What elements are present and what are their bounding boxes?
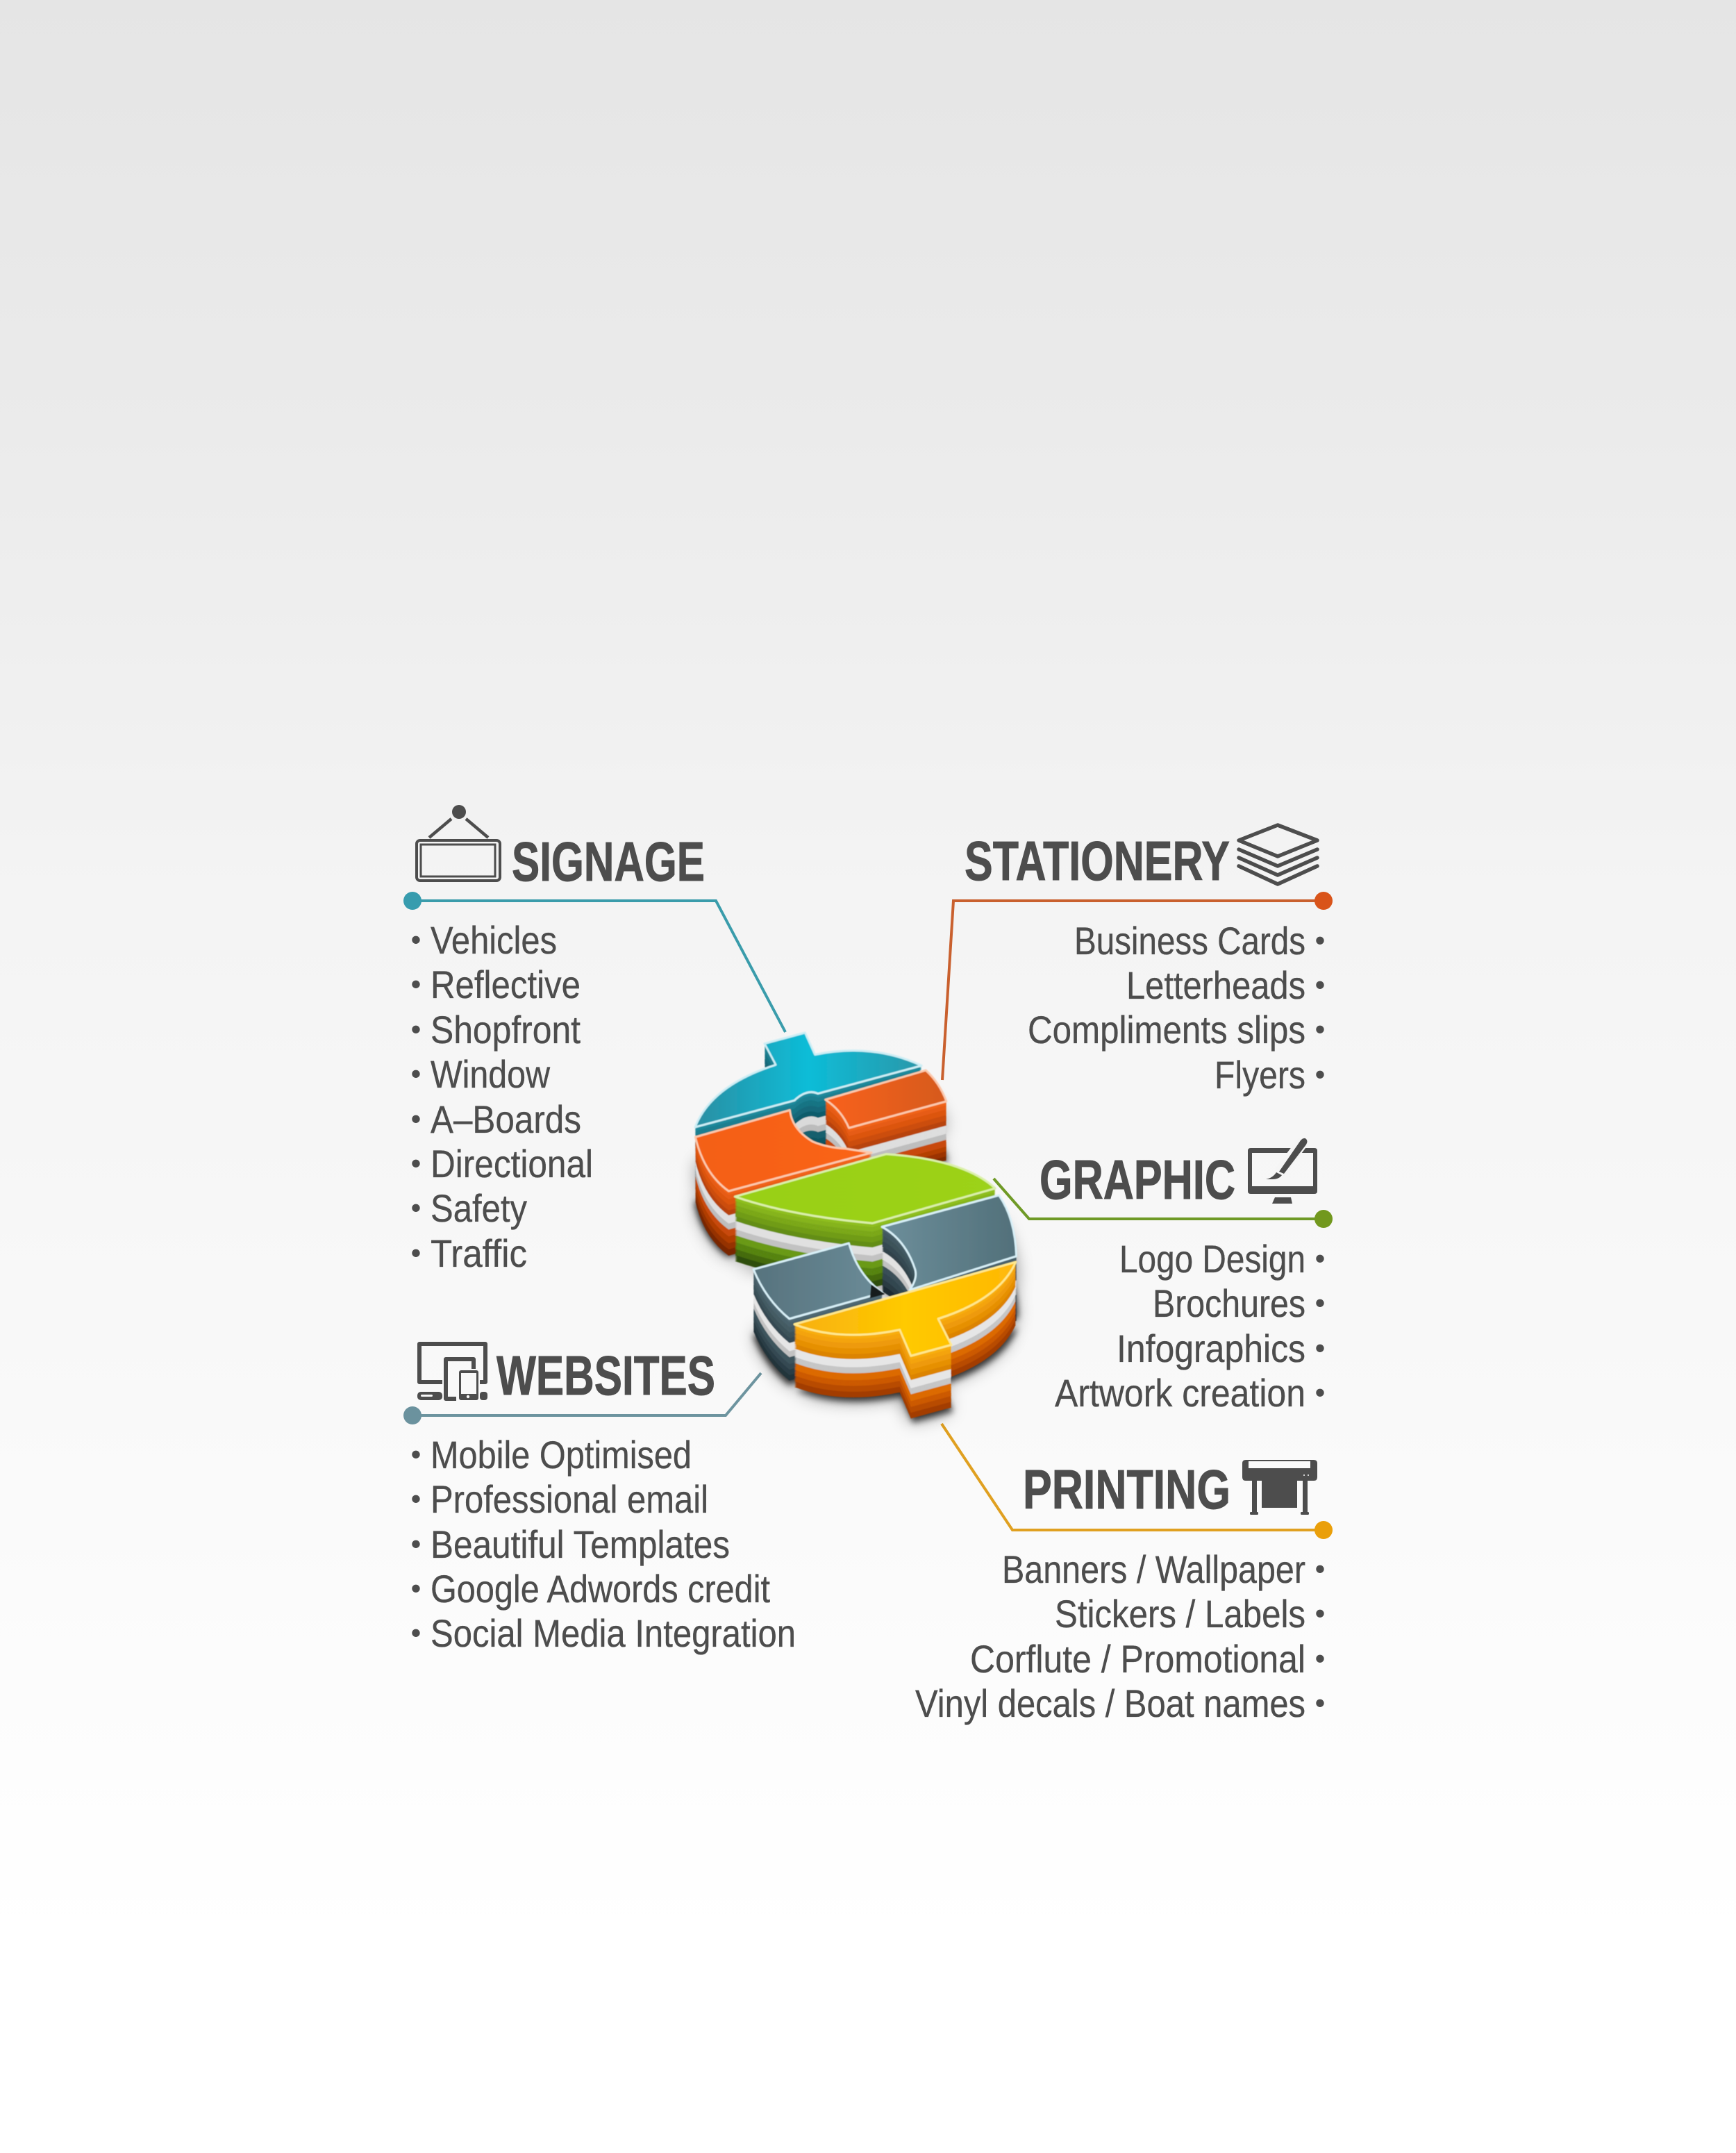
dollar body: [695, 1033, 1017, 1418]
list: graphic items: •: [1315, 1376, 1325, 1408]
heading: stationery: STATIONERY: [965, 830, 1230, 892]
list: signage items: •: [411, 1236, 421, 1269]
list: signage items: Vehicles: [431, 918, 557, 962]
list: graphic items: •: [1315, 1242, 1325, 1274]
icon: hanging sign: [417, 805, 500, 881]
list: stationery items: •: [1315, 1013, 1325, 1045]
list: stationery items: •: [1315, 968, 1325, 1001]
panel: stationery: [942, 825, 1333, 1097]
list: stationery items: [1028, 919, 1325, 1097]
dollar segment: orange right: [826, 1070, 946, 1187]
list: printing items: Corflute / Promotional: [970, 1637, 1305, 1681]
panel: websites: [403, 1344, 796, 1655]
list: signage items: •: [411, 923, 421, 956]
list: signage items: •: [411, 1191, 421, 1224]
list: signage items: •: [411, 1013, 421, 1045]
icon: large format printer: [1242, 1460, 1317, 1515]
list: signage items: Shopfront: [431, 1008, 581, 1051]
leader line: stationery: [942, 892, 1333, 1080]
icon: monitor with paintbrush: [1248, 1138, 1317, 1204]
list: stationery items: •: [1315, 1058, 1325, 1090]
list: graphic items: [1055, 1237, 1325, 1415]
list: signage items: Safety: [431, 1186, 527, 1230]
list: stationery items: Flyers: [1215, 1053, 1305, 1097]
heading: printing: PRINTING: [1023, 1458, 1230, 1520]
list: signage items: •: [411, 1147, 421, 1179]
list: printing items: •: [1315, 1642, 1325, 1674]
list: stationery items: •: [1315, 924, 1325, 956]
leader line: signage: [403, 892, 785, 1032]
leader line: graphic: [994, 1179, 1333, 1228]
list: stationery items: Compliments slips: [1028, 1008, 1305, 1051]
list: graphic items: •: [1315, 1331, 1325, 1364]
leader line: printing: [942, 1424, 1333, 1539]
list: signage items: A–Boards: [431, 1097, 581, 1141]
list: printing items: Stickers / Labels: [1055, 1592, 1305, 1636]
list: printing items: •: [1315, 1597, 1325, 1629]
list: printing items: •: [1315, 1686, 1325, 1719]
icon: paper stack: [1239, 825, 1317, 884]
list: websites items: Social Media Integration: [431, 1611, 796, 1655]
list: websites items: Beautiful Templates: [431, 1522, 730, 1566]
list: websites items: Professional email: [431, 1477, 708, 1521]
icon: responsive devices: [417, 1344, 487, 1400]
list: websites items: Mobile Optimised: [431, 1433, 692, 1477]
list: websites items: [411, 1433, 796, 1655]
dollar segment: grey right: [882, 1195, 1017, 1354]
list: stationery items: Business Cards: [1074, 919, 1305, 963]
list: printing items: •: [1315, 1552, 1325, 1585]
list: signage items: •: [411, 1057, 421, 1090]
list: graphic items: Artwork creation: [1055, 1371, 1305, 1415]
list: graphic items: Brochures: [1153, 1281, 1305, 1325]
dollar segment: yellow bottom: [794, 1262, 1016, 1418]
list: signage items: Reflective: [431, 963, 581, 1006]
list: websites items: •: [411, 1482, 421, 1515]
list: websites items: •: [411, 1527, 421, 1560]
list: graphic items: Infographics: [1117, 1327, 1305, 1370]
list: signage items: [411, 918, 593, 1275]
list: stationery items: Letterheads: [1126, 963, 1305, 1007]
list: printing items: [915, 1547, 1325, 1725]
list: signage items: •: [411, 1102, 421, 1135]
panel: signage: [403, 805, 785, 1275]
heading: graphic: GRAPHIC: [1040, 1149, 1235, 1211]
illustration: 3D dollar sign: [694, 1033, 1018, 1422]
list: signage items: Directional: [431, 1142, 593, 1186]
list: signage items: Window: [431, 1052, 550, 1096]
heading: websites: WEBSITES: [496, 1345, 715, 1406]
list: websites items: •: [411, 1438, 421, 1470]
list: graphic items: Logo Design: [1119, 1237, 1305, 1281]
panel: graphic: [994, 1138, 1333, 1415]
panel: printing: [915, 1424, 1333, 1725]
list: signage items: •: [411, 967, 421, 1000]
dollar drop shadow: [694, 1097, 1018, 1422]
dollar segment: green centre: [735, 1154, 995, 1288]
list: printing items: Banners / Wallpaper: [1002, 1547, 1305, 1591]
list: printing items: Vinyl decals / Boat names: [915, 1681, 1305, 1725]
dollar hole shadow: [870, 1284, 885, 1298]
list: websites items: Google Adwords credit: [431, 1567, 770, 1611]
dollar segment: orange left: [695, 1110, 871, 1256]
heading: signage: SIGNAGE: [512, 831, 705, 892]
list: signage items: Traffic: [431, 1231, 527, 1275]
list: websites items: •: [411, 1616, 421, 1649]
leader line: websites: [403, 1373, 761, 1424]
dollar segment: blue top: [695, 1033, 921, 1189]
list: graphic items: •: [1315, 1286, 1325, 1319]
list: websites items: •: [411, 1572, 421, 1604]
dollar segment: grey left: [753, 1243, 883, 1381]
